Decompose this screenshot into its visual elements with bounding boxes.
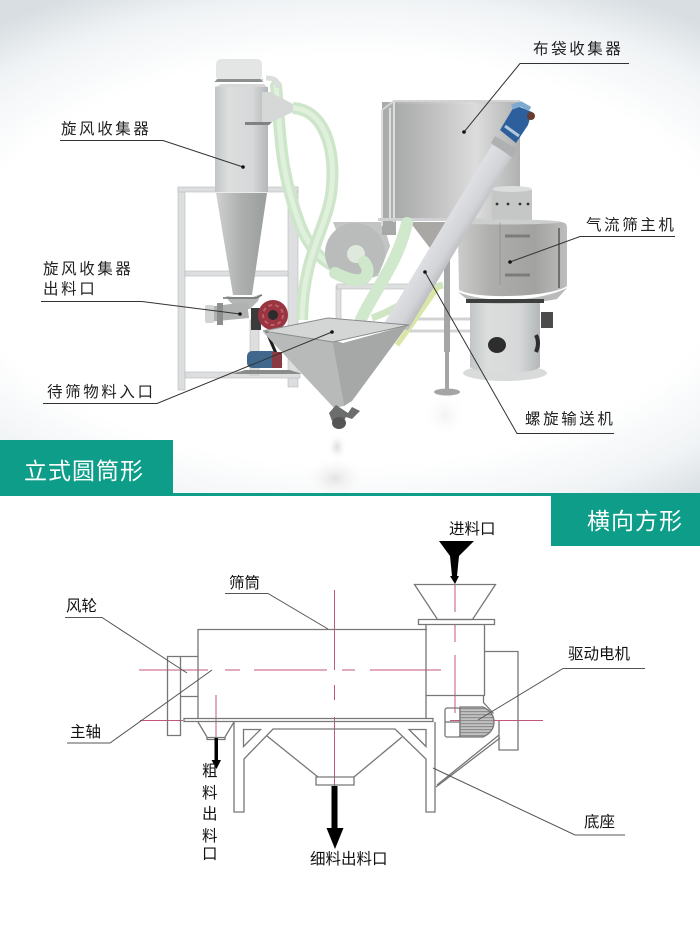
bag collector (378, 101, 520, 256)
banner: vertical cylinder: 立式圆筒形 (24, 458, 144, 484)
diagram: horizontal type (65, 520, 645, 868)
label: coarse outlet: 料 (202, 784, 218, 802)
photo background (0, 0, 700, 494)
discharge screw, wheel, motor (205, 300, 302, 374)
label: bag collector: 布袋收集器 (533, 40, 624, 58)
label: coarse outlet (202, 762, 218, 863)
cyclone collector (214, 59, 293, 309)
arrow: fine outlet (326, 786, 344, 849)
label: sieve drum: 筛筒 (229, 574, 260, 592)
label: material inlet (43, 330, 334, 404)
sieve drum (198, 630, 427, 719)
label: air-flow screen main (508, 216, 677, 264)
label: cyclone outlet: 出料口 (43, 280, 97, 298)
label: air-flow screen main: 气流筛主机 (586, 216, 677, 234)
feed hopper (263, 318, 409, 429)
label: coarse outlet: 料 (202, 827, 218, 845)
hose: cyclone elbow to fan (276, 86, 369, 275)
label: cyclone collector (60, 120, 245, 169)
fan (325, 219, 396, 283)
air-flow screen main unit (449, 186, 567, 381)
label: coarse outlet: 口 (202, 846, 218, 863)
banner: horizontal square (551, 496, 700, 546)
hose: lower conveyor (372, 285, 443, 318)
label: feed inlet: 进料口 (449, 520, 496, 538)
hose: bag to hopper (361, 223, 407, 319)
centre lines (139, 584, 543, 786)
hose: cyclone inlet arch (293, 108, 333, 320)
photo: air-flow screen machine (178, 59, 567, 429)
screw conveyor (383, 104, 535, 330)
label: coarse outlet: 粗 (202, 762, 218, 780)
banner: horizontal square: 横向方形 (587, 508, 683, 534)
label: cyclone outlet (41, 260, 242, 316)
label: cyclone collector: 旋风收集器 (61, 120, 152, 138)
label: drive motor: 驱动电机 (568, 645, 631, 663)
label: fine outlet: 细料出料口 (310, 850, 388, 868)
label: base: 底座 (584, 813, 615, 831)
divider band (0, 493, 700, 496)
arrow: coarse outlet (212, 738, 221, 769)
support frame (178, 187, 470, 390)
label: main shaft: 主轴 (70, 723, 101, 741)
label: screw conveyor (423, 270, 616, 434)
base plate and stands (184, 718, 433, 722)
conveyor stand (434, 258, 460, 396)
machine outline (168, 584, 518, 812)
label: screw conveyor: 螺旋输送机 (525, 410, 616, 428)
arrow: feed (439, 541, 474, 584)
label: cyclone outlet: 旋风收集器 (43, 260, 134, 278)
banner: vertical cylinder (0, 440, 173, 496)
label: material inlet: 待筛物料入口 (47, 383, 156, 401)
label: bag collector (462, 40, 629, 134)
feed hopper (414, 584, 496, 620)
label: wind wheel: 风轮 (66, 597, 97, 615)
label: coarse outlet: 出 (202, 805, 218, 823)
drive motor (445, 708, 460, 737)
leader lines (65, 594, 645, 835)
